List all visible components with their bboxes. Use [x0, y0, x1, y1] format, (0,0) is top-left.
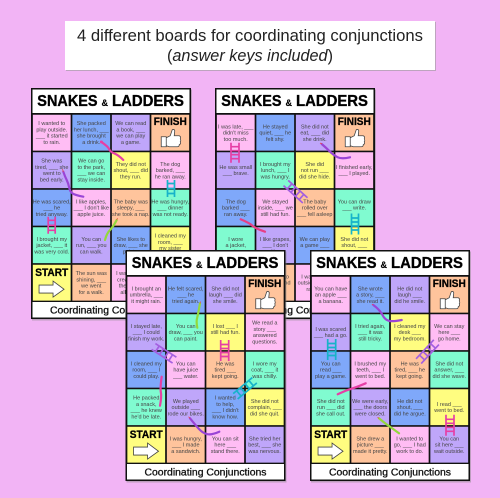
board 4 cells: an apple ___ [315, 293, 348, 299]
snake: green, board 1 [105, 218, 118, 240]
board 2 cells: I was late, ___ [218, 124, 254, 130]
board 3 title: SNAKES [132, 255, 192, 272]
board 3 cells: ___ water. [172, 374, 199, 380]
board 4 cells: You can have [314, 286, 347, 292]
snake: purple, board 2 [320, 143, 350, 158]
board 3 cells: story ___ [253, 327, 277, 333]
board 4 cells: here ___ [438, 330, 461, 336]
board 1 cells: He was hungry, [151, 199, 190, 205]
board 2 cells: We went to [262, 274, 289, 280]
board 1 cells: tried anyway. [36, 212, 68, 218]
board 3 cells: a snack, [136, 402, 157, 408]
board 1 cells: ___ dinner [156, 206, 183, 212]
board 4 title: & [380, 260, 388, 270]
board 1 cells: ___ it started [35, 134, 68, 140]
board 3 cells: best, ___ she [248, 443, 281, 449]
board 4 cells: play a game. [315, 374, 347, 380]
board 3 cells: umbrella, ___ [130, 293, 164, 299]
board 4 cells: He was [401, 361, 419, 367]
board 3 cells: was chilly. [251, 374, 278, 380]
board 2 cells: a game ___ [300, 243, 330, 249]
board 4 cells: she read it. [357, 299, 384, 305]
ladder: purple diagonal, board 3 [152, 344, 176, 363]
board 1 cells: I wanted to [38, 121, 65, 127]
board 2 cells: a jacket, [226, 243, 246, 249]
board 3 cells: complain, ___ [248, 405, 283, 411]
ladder: purple diagonal, board 2 [283, 180, 308, 203]
board 4 cells: FINISH [433, 278, 466, 290]
board 4 cells: teeth, ___ I [356, 368, 384, 374]
board 1 cells: her lunch, ___ [74, 127, 110, 133]
board 4 cells: START [314, 429, 347, 441]
board 3 [126, 250, 286, 482]
board 4 cells: She did not [317, 399, 345, 405]
board 2 cells: shout, ___ [341, 243, 368, 249]
board 1 title: LADDERS [112, 93, 184, 110]
board 4 cells: did he argue. [394, 411, 426, 417]
board 4 cells: went to bed. [433, 408, 465, 414]
board 3 cells: She did not [211, 286, 240, 292]
ladder: pink, board 4 [446, 415, 454, 436]
board 4 cells: ___ the doors [352, 405, 387, 411]
board 2 cells: I wanted to [301, 274, 328, 280]
board 4 cells: kept going. [396, 374, 424, 380]
board 1 cells: She likes to [117, 237, 145, 243]
snake: pink, board 3 [160, 377, 162, 406]
board 3 cells: tired ___ [215, 368, 237, 374]
board 2 cells: ___ brave. [222, 171, 249, 177]
board 4 cells: She drew a [356, 436, 385, 442]
board 3 cells: can paint. [174, 336, 198, 342]
board 3 cells: he'd be late. [131, 414, 162, 420]
board 4 title [312, 252, 468, 275]
board 1 cells: play outside. [36, 127, 68, 133]
board 2 cells: barked ___ [222, 206, 250, 212]
board 1 cells: I like apples, [76, 199, 107, 205]
board 3 cells: ___ he knew [130, 408, 162, 414]
heading text: 4 different boards for coordinating conjunctions [77, 26, 423, 45]
board 1 title: SNAKES [37, 93, 98, 110]
board 1 cells: apple juice. [77, 212, 106, 218]
board 4 cells: run ___ did [317, 405, 345, 411]
board 3 cells: I lost ___ I [213, 324, 238, 330]
board 3 cells: kept going. [212, 374, 239, 380]
board 1 cells: I brought my [36, 237, 67, 243]
snake: pink, board 4 [338, 383, 366, 394]
board 4 cells: She wrote [358, 286, 383, 292]
board 1 cells: ___ I don't like [73, 206, 109, 212]
snake: green, board 3 [197, 302, 200, 328]
board 4 cells: ___ had a go. [313, 333, 348, 339]
snake: purple, board 3 [188, 417, 219, 434]
board 3 cells: draw, ___ you [169, 330, 203, 336]
ladder: pink, board 2 [231, 143, 239, 163]
board 1 cells: I cleaned my [155, 234, 186, 240]
snake: pink, board 2 [241, 219, 265, 232]
board 1 cells: cream, ___ [117, 277, 145, 283]
board 3 cells: You can [176, 324, 196, 330]
board 3 cells: He was [216, 361, 235, 367]
board 3 cells: He felt scared, [168, 286, 204, 292]
board 3 cells: was nervous. [248, 449, 281, 455]
board 4 title: LADDERS [391, 255, 463, 272]
board 1 cells: He was scared, [33, 199, 71, 205]
board 3 cells: ___ I didn't [211, 408, 239, 414]
board 1 cells: was not ready. [152, 212, 188, 218]
board 4 cells: You can [439, 436, 459, 442]
board 3 cells: You can sit [212, 436, 239, 442]
board 2 cells: ___ fell asleep [296, 212, 332, 218]
board 3 cells: know how. [212, 414, 239, 420]
board 1 cells: We can read [115, 121, 146, 127]
board 3 cells: tried again. [172, 299, 200, 305]
board 1 cells: ___ he [42, 206, 60, 212]
board 1 cells: a book, ___ [116, 127, 146, 133]
board 3 cells: ___ I made [171, 443, 200, 449]
board 2 footer [216, 302, 374, 318]
board 4 cells: were closed. [354, 411, 386, 417]
board 1 cells: START [35, 267, 68, 279]
board 3 cells: rode our bikes. [168, 411, 204, 417]
board 4 [310, 250, 471, 482]
board 1 cells: paints. [123, 249, 139, 255]
board 4 cells: She did not [435, 361, 464, 367]
board 3 title [127, 252, 284, 275]
board 1 cells: You can [81, 237, 101, 243]
board 3 cells: ___ I could [132, 330, 160, 336]
board 4 cells: We can stay [434, 324, 465, 330]
board 2 cells: the park and [260, 281, 291, 287]
board 3 cells: it might rain. [131, 299, 162, 305]
board 4 cells: desk ___ [399, 330, 422, 336]
board 2 cells: ___ I don't [261, 243, 288, 249]
board 2 cells: was hungry. [260, 174, 290, 180]
board 3 cells: stand there. [211, 449, 240, 455]
board 3 footer [127, 464, 284, 480]
ladder: teal, board 4 [328, 339, 336, 360]
board 1 footer: Coordinating Conjunctions [50, 306, 172, 316]
board 1 cells: sleepy, ___ [117, 206, 146, 212]
board 1 cells: she took a nap. [112, 212, 150, 218]
board 4 cells: sit here ___ [435, 443, 465, 449]
ladder: teal, board 1 [168, 180, 174, 197]
board 1 cells [33, 115, 190, 301]
board 3 title: & [196, 260, 203, 270]
board 3 cells: I brought an [132, 286, 161, 292]
board 3 cells: We read a [252, 321, 278, 327]
board 4 cells: laugh ___ [398, 293, 423, 299]
ladder: teal, board 2 [352, 214, 358, 234]
board 3 footer: Coordinating Conjunctions [144, 468, 266, 478]
board 3 cells: I cleaned my [131, 361, 162, 367]
board 1 cells: barked, ___ [156, 168, 186, 174]
board 2 cells: like [271, 249, 279, 255]
board 1 cells: run, ___ you [76, 243, 107, 249]
board 2 cells: He stayed [263, 124, 288, 130]
snake: pink, board 1 [100, 140, 123, 160]
board 2 cells: too much. [224, 137, 248, 143]
board 2 cells: inside, ___ we [258, 206, 293, 212]
board 3 cells: answered [253, 333, 277, 339]
board 3 cells: ___ he [176, 293, 194, 299]
board 1 cells: shining, ___ [76, 277, 107, 283]
board 3 cells: laugh ___ did [209, 293, 242, 299]
board 2 footer: Coordinating Conjunctions [234, 306, 356, 316]
board 3 cells: a sandwich. [171, 449, 201, 455]
board 4 cells [312, 277, 468, 463]
board 4 cells: went to bed. [354, 374, 386, 380]
board 2 title [216, 90, 374, 113]
board 3 cells: outside ___ [172, 405, 201, 411]
board 4 cells: still tricky. [359, 336, 382, 342]
board 1 cells: we went [80, 284, 102, 290]
board 3 cells: questions. [252, 339, 278, 345]
board 2 cells: not run ___ [301, 168, 330, 174]
board 2 cells: I brought my [260, 162, 291, 168]
snake: purple, board 1 [62, 169, 83, 197]
board 1 cells: shout, ___ did [113, 168, 148, 174]
board 4 cells: ___ it was [357, 330, 383, 336]
board 4 cells: I cleaned my [394, 324, 426, 330]
board 2 cells: I finished early, [336, 165, 373, 171]
board 4 cells: I brushed my [354, 361, 386, 367]
board 3 cells: I was hungry, [170, 436, 202, 442]
board 2 cells: You can draw [338, 199, 371, 205]
board 2 [215, 88, 376, 320]
board 1 cells: they run. [120, 174, 142, 180]
board 4 cells: I was scared [315, 327, 346, 333]
board 3 cells: START [130, 429, 163, 441]
board 4 cells: go home. [438, 336, 461, 342]
board 1 cells: I wanted ice [116, 271, 145, 277]
board 4 cells: a story, ___ [356, 293, 385, 299]
board 2 title: SNAKES [221, 93, 282, 110]
board 4 cells: did he smile. [394, 299, 426, 305]
board 3 cells: She did not [251, 399, 279, 405]
board 1 cells: a drink. [82, 140, 101, 146]
board 2 cells: FINISH [338, 116, 371, 128]
board 2 cells: rolled over [302, 206, 328, 212]
ladder: pink, board 1 [48, 217, 55, 234]
board 3 cells: She tried her [249, 436, 281, 442]
board 4 cells: I read ___ [437, 402, 463, 408]
board 3 cells: He packed [133, 396, 159, 402]
board 1 cells: all gone. [120, 290, 142, 296]
board 3 cells: FINISH [248, 278, 281, 290]
board 4 cells: go, ___ I had [394, 443, 426, 449]
board 3 cells: You can [176, 361, 196, 367]
board 4 cells: We were early, [352, 399, 389, 405]
board 2 cells: did she hide. [299, 174, 331, 180]
board 1 cells: was very cold. [33, 249, 70, 255]
board 1 cells: tired, ___ she [35, 165, 68, 171]
ladder: purple diagonal, board 4 [416, 340, 439, 364]
board 1 cells: ___ we can [76, 171, 105, 177]
board 1 cells: room, ___ [158, 240, 184, 246]
board 4 cells: wait outside. [433, 449, 465, 455]
board 2 cells [217, 115, 373, 301]
board 2 cells: She did not [340, 237, 369, 243]
board 2 cells: played. [266, 287, 285, 293]
board 1 cells: for a walk. [79, 290, 104, 296]
board 2 cells: lunch, ___ I [261, 168, 290, 174]
board 4 cells: I wanted to [396, 436, 423, 442]
board 4 cells: shout, ___ [397, 405, 424, 411]
board 4 cells: my bedroom. [394, 336, 426, 342]
board 4 footer: Coordinating Conjunctions [329, 468, 451, 478]
snake: purple, board 4 [372, 304, 402, 321]
snake: green, board 4 [378, 417, 399, 433]
board 1 cells: She was [41, 159, 63, 165]
board 2 cells: outside, ___ it [298, 281, 332, 287]
board 1 cells: The sun was [76, 271, 107, 277]
board 4 cells: picture ___ [357, 443, 385, 449]
heading panel [65, 21, 436, 71]
board 3 cells: could play. [133, 374, 160, 380]
board 3 cells: coat, ___ it [251, 368, 279, 374]
board 3 cells: to help, [216, 402, 235, 408]
board 3 cells: I stayed late, [131, 324, 162, 330]
board 2 cells: ___ I played. [338, 171, 370, 177]
board 1 cells: We can go [78, 159, 104, 165]
board 3 cells: have juice [173, 368, 198, 374]
board 1 cells: he ran away. [155, 174, 186, 180]
board 2 cells: She did [305, 162, 324, 168]
board 4 cells: work to do. [395, 449, 424, 455]
board 1 cells: The baby was [114, 199, 148, 205]
board 2 title: LADDERS [296, 93, 368, 110]
board 3 cells: I wore my [253, 361, 277, 367]
board 3 cells: did she quit. [250, 411, 280, 417]
board 2 cells: The baby [303, 199, 326, 205]
board 3 cells [127, 277, 284, 463]
board 1 cells: to rain. [43, 140, 61, 146]
board 1 cells: we can play [115, 134, 146, 140]
board 1 cells: to the park, [77, 165, 105, 171]
board 3 cells: room, ___ I [132, 368, 161, 374]
board 1 cells: they were [119, 284, 143, 290]
board 1 cells: stay inside. [77, 177, 105, 183]
board 4 cells: He did not [397, 286, 423, 292]
board 3 cells: still had fun. [211, 330, 240, 336]
board 1 cells: The dog [160, 162, 180, 168]
board 2 cells: ___ write. [341, 206, 367, 212]
board 3 cells: here ___ [214, 443, 237, 449]
board 4 cells: tired, ___ he [394, 368, 425, 374]
board 2 cells: ran away. [224, 212, 248, 218]
board 1 cells: FINISH [154, 116, 187, 128]
board 2 cells: still had fun. [261, 212, 290, 218]
board 3 cells: finish my work. [128, 336, 165, 342]
board 2 cells: eat, ___ did [300, 131, 329, 137]
board 1 cells: They did not [116, 162, 146, 168]
board 4 cells: a banana. [319, 299, 343, 305]
board 4 cells: You can [321, 361, 341, 367]
board 1 cells: She packed [77, 121, 106, 127]
board 1 cells: she brought [77, 134, 106, 140]
board 1 cells: bed early. [40, 177, 64, 183]
board 3 title: LADDERS [206, 255, 278, 272]
board 4 cells: He did not [397, 399, 423, 405]
board 1 cells: went to [42, 171, 61, 177]
board 1 cells: can walk. [80, 249, 103, 255]
board 1 cells: my sister [159, 246, 181, 252]
board 1 title [32, 90, 190, 113]
board 2 cells: quiet, ___ he [259, 131, 291, 137]
board 4 cells: read ___ [320, 368, 343, 374]
board 2 cells: I like grapes, [260, 237, 291, 243]
board 1 title: & [102, 98, 108, 108]
board 1 cells: jacket, ___ it [35, 243, 68, 249]
board 4 cells: I tried again, [355, 324, 386, 330]
board 4 footer [312, 464, 468, 480]
board 2 cells: ___ it was [222, 249, 248, 255]
board 2 cells: She did not [301, 124, 329, 130]
board 2 cells: He was small [219, 165, 252, 171]
board 4 cells: she call out. [316, 411, 346, 417]
board 1 footer [32, 302, 190, 318]
sub-heading text: (answer keys included) [167, 46, 333, 65]
board 3 cells: I wanted [215, 396, 236, 402]
board 2 cells: The dog [226, 199, 246, 205]
board 4 cells: answer, ___ [434, 368, 465, 374]
board 2 title: & [286, 98, 292, 108]
board 1 cells: a game. [121, 140, 141, 146]
board 3 cells: We played [173, 399, 199, 405]
board 1 [31, 88, 192, 320]
board 4 cells: made it pretty. [353, 449, 388, 455]
board 1 cells: draw, ___ she [114, 243, 148, 249]
board 2 cells: she drink. [303, 137, 327, 143]
board 2 cells: felt shy. [266, 137, 285, 143]
board 2 cells: didn't miss [223, 131, 249, 137]
ladder: pink, board 3 [221, 340, 229, 361]
ladder: teal diagonal, board 3 [233, 378, 257, 399]
board 2 cells: rained. [306, 287, 324, 293]
board 2 cells: I wore [228, 237, 243, 243]
board 4 cells: did she wave. [432, 374, 467, 380]
board 3 cells: she smile. [213, 299, 238, 305]
board 4 title: SNAKES [316, 255, 377, 272]
board 2 cells: We stayed [262, 199, 288, 205]
board 2 cells: We can play [300, 237, 330, 243]
